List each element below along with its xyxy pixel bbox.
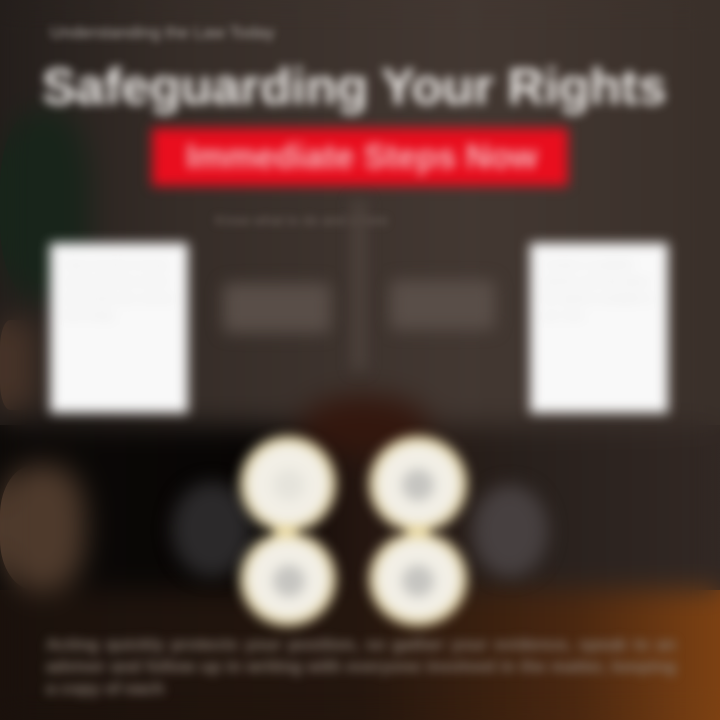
icon: top right circle — [369, 436, 467, 532]
panel: left center label — [223, 283, 331, 333]
title: Safeguarding Your Rights — [42, 58, 666, 115]
red banner — [152, 128, 568, 186]
icon: right grey circle — [472, 485, 548, 577]
panel: right center label — [390, 280, 495, 330]
icon: bottom right circle — [369, 532, 467, 626]
eyebrow text: Understanding the Law Today — [50, 23, 275, 42]
icon: top left circle — [240, 436, 336, 532]
center vertical line — [352, 200, 366, 370]
icon: left grey circle — [172, 482, 252, 577]
left document text: Keep records of every event and save all the documents you receive here today. — [62, 259, 175, 322]
panel: right document — [530, 243, 668, 413]
right document text: Contact a qualified adviser and ask about the options available to you now. — [542, 259, 655, 322]
connector: right — [408, 510, 428, 560]
subheading divider text: Know what to do and where — [215, 212, 388, 228]
icon: bottom left circle — [240, 532, 336, 626]
panel: left document — [50, 243, 188, 413]
connector: left — [276, 510, 296, 560]
footer text: Acting quickly protects your position, so gather your evidence, speak to an adviser and follow up in writing with everyone involved in the matter, keeping a copy of each — [46, 635, 676, 698]
banner text: Immediate Steps Now — [186, 138, 537, 176]
